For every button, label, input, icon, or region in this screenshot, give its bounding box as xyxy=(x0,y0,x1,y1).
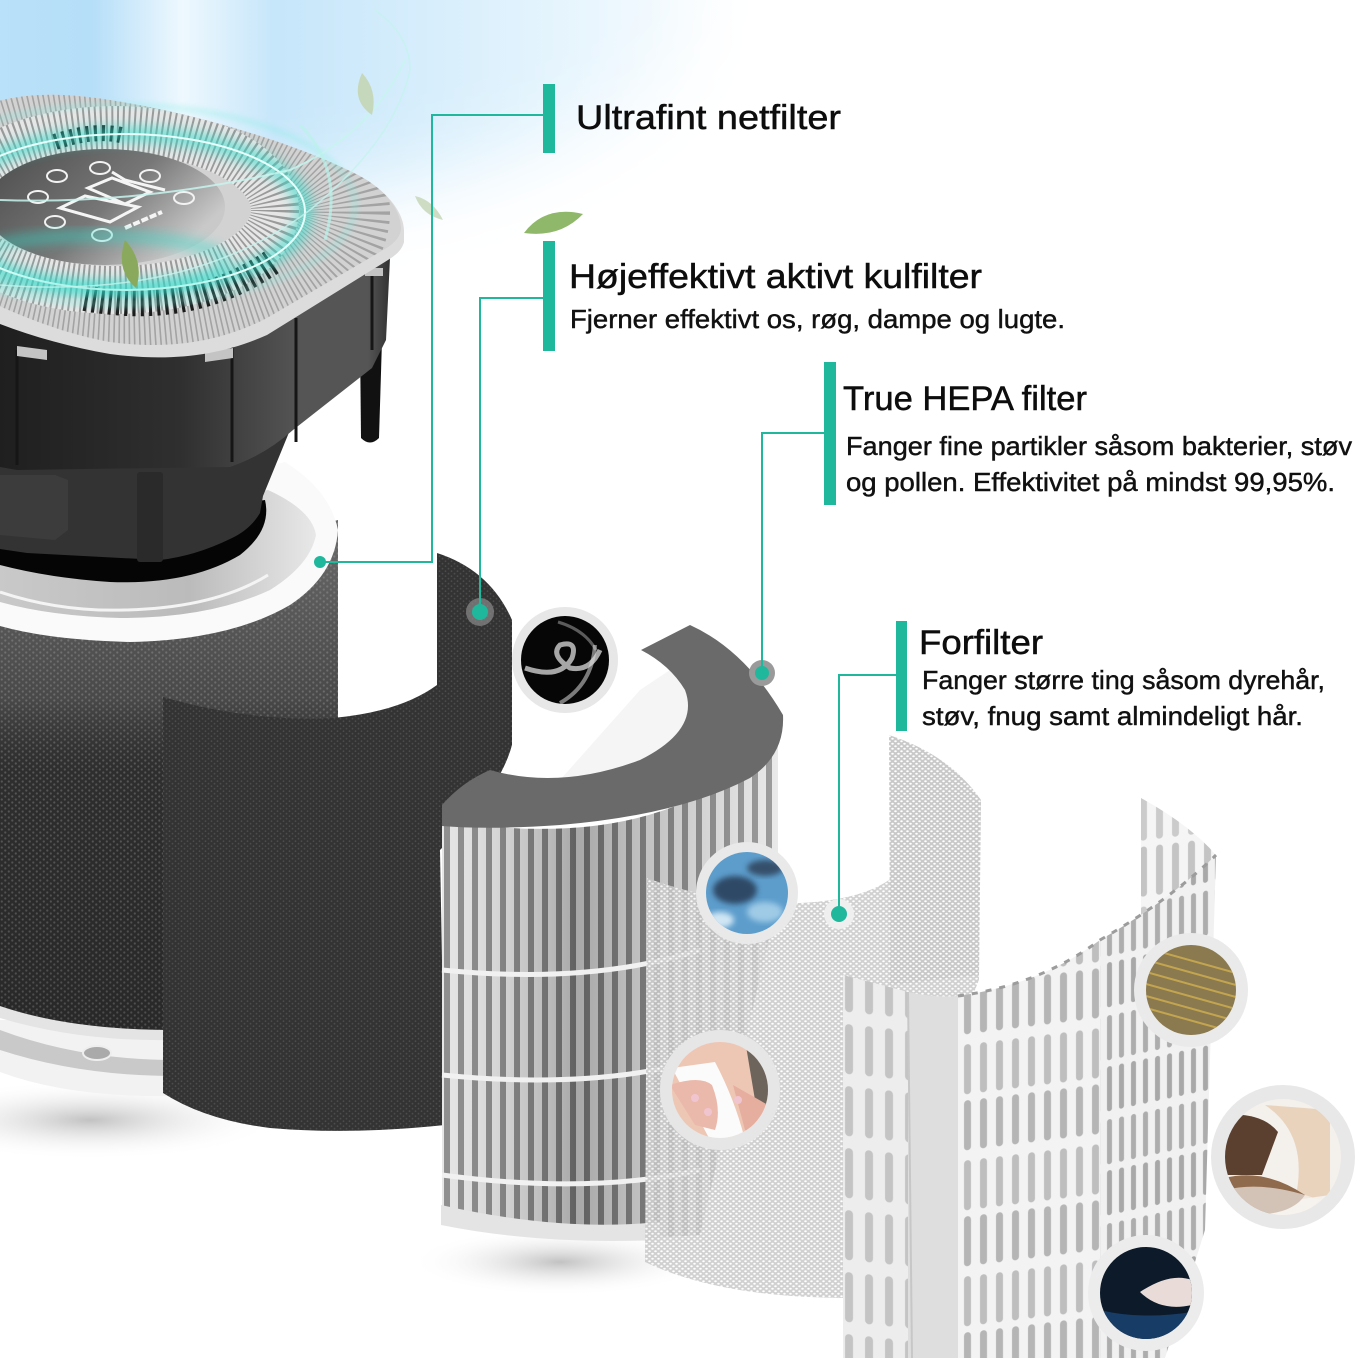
lid vents xyxy=(0,104,345,320)
callout: Ultrafint netfilter xyxy=(314,84,841,568)
purifier collar ring xyxy=(0,462,338,642)
HEPA gray cap xyxy=(442,625,783,828)
carbon filter sheet xyxy=(163,553,512,1131)
perforated pre-filter shell xyxy=(843,798,1216,1358)
callout: True HEPA filter: True HEPA filter xyxy=(843,380,1087,418)
callout: Højeffektivt aktivt kulfilter: Fjerner effektivt os, røg, dampe og lugte. xyxy=(570,304,1065,334)
purifier motor body xyxy=(0,235,400,562)
ground shadows xyxy=(0,1080,710,1296)
HEPA filter xyxy=(441,625,783,1241)
callout: Forfilter: støv, fnug samt almindeligt hår. xyxy=(922,701,1303,731)
icon circle: tissue and hands xyxy=(660,1030,780,1150)
icon circle: hand with lint xyxy=(1088,1235,1204,1351)
air swirl glow xyxy=(0,10,410,305)
pre-filter fine net xyxy=(645,735,981,1298)
callout: True HEPA filter xyxy=(749,362,1352,686)
icon circle: smoke xyxy=(512,607,618,713)
icon circle: gold mesh xyxy=(1134,933,1248,1047)
control display xyxy=(0,149,225,265)
purifier lid xyxy=(0,10,410,357)
icon circle: hair xyxy=(1211,1085,1355,1229)
callout: Højeffektivt aktivt kulfilter: Højeffektivt aktivt kulfilter xyxy=(569,258,982,296)
callout: Ultrafint netfilter: Ultrafint netfilter xyxy=(576,99,841,137)
icon: leaves xyxy=(122,73,583,288)
icon circle: dust mite xyxy=(696,842,798,944)
callout: Forfilter: Fanger større ting såsom dyrehår, xyxy=(922,665,1325,695)
callout: True HEPA filter: og pollen. Effektivitet på mindst 99,95%. xyxy=(846,467,1335,497)
callout: Højeffektivt aktivt kulfilter xyxy=(466,241,1065,626)
purifier base with carbon mesh cylinder xyxy=(0,520,338,1096)
callout: True HEPA filter: Fanger fine partikler såsom bakterier, støv xyxy=(846,431,1352,461)
callout: Forfilter xyxy=(824,621,1325,929)
callout: Forfilter: Forfilter xyxy=(919,624,1043,662)
background: blue sky glow xyxy=(0,0,680,214)
